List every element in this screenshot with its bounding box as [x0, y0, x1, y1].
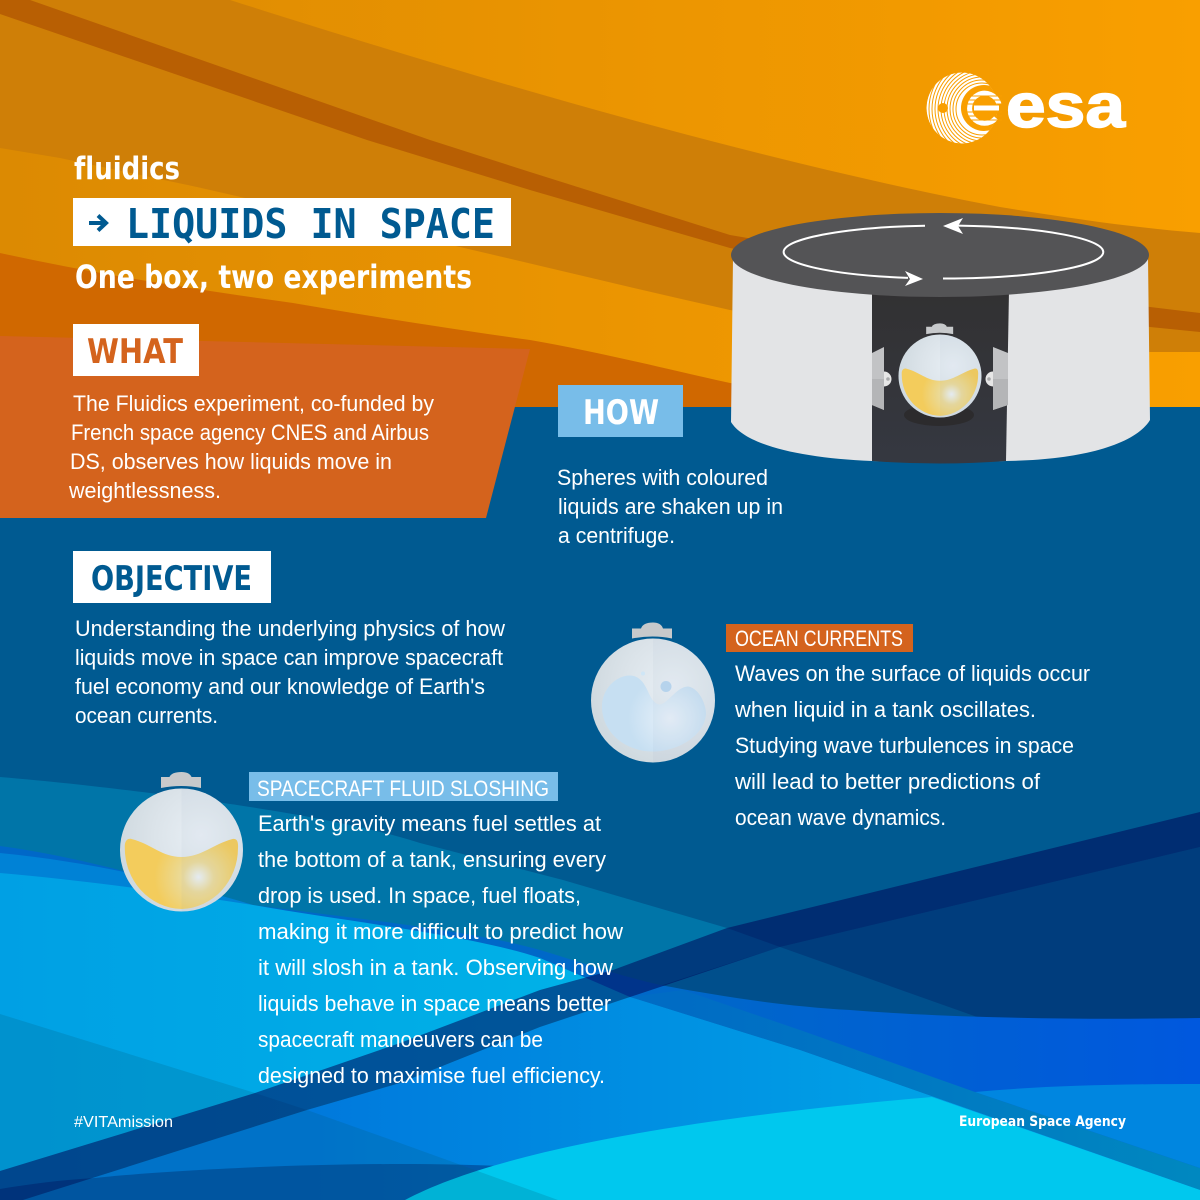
spacecraft fluid sloshing heading: SPACECRAFT FLUID SLOSHING [257, 776, 549, 801]
ocean currents text: when liquid in a tank oscillates. [734, 697, 1036, 722]
spacecraft fluid sloshing text: liquids behave in space means better [258, 991, 611, 1016]
how heading [558, 385, 683, 437]
spacecraft fluid sloshing text: it will slosh in a tank. Observing how [258, 955, 613, 980]
ocean currents text: Studying wave turbulences in space [735, 733, 1074, 758]
background: orange waves [0, 0, 1200, 440]
background: blue waves [0, 407, 1200, 1200]
ocean currents heading: OCEAN CURRENTS [735, 626, 903, 651]
what heading [73, 324, 199, 376]
what heading: WHAT [87, 332, 184, 372]
title banner [73, 198, 511, 248]
spacecraft fluid sloshing text [258, 811, 623, 1088]
fuel sphere [120, 772, 243, 912]
logo wordmark: esa [1006, 72, 1126, 141]
what text: French space agency CNES and Airbus [71, 420, 429, 445]
centrifuge illustration [731, 213, 1150, 464]
how text: Spheres with coloured [557, 465, 768, 490]
credit: European Space Agency [959, 1114, 1126, 1130]
title: fluidics: fluidics [74, 151, 180, 187]
ocean currents text [734, 661, 1090, 830]
how text: liquids are shaken up in [558, 494, 783, 519]
spacecraft fluid sloshing text: making it more difficult to predict how [258, 919, 623, 944]
ocean currents text: will lead to better predictions of [734, 769, 1041, 794]
ocean currents text: Waves on the surface of liquids occur [735, 661, 1090, 686]
spacecraft fluid sloshing text: the bottom of a tank, ensuring every [258, 847, 606, 872]
sphere mounts [872, 347, 1008, 410]
how heading: HOW [583, 393, 659, 433]
rotation arrows [784, 218, 1103, 286]
objective text [75, 616, 505, 728]
ocean sphere [591, 622, 715, 762]
objective text: Understanding the underlying physics of how [75, 616, 505, 641]
what text: The Fluidics experiment, co-funded by [73, 391, 434, 416]
sphere with yellow liquid [898, 323, 982, 418]
drum body [731, 258, 1150, 463]
spacecraft fluid sloshing text: drop is used. In space, fuel floats, [258, 883, 581, 908]
objective text: liquids move in space can improve spacecraft [75, 645, 503, 670]
icon: arrow [89, 216, 106, 230]
title text: LIQUIDS IN SPACE [126, 200, 495, 248]
esa logo [926, 72, 1126, 144]
how text: a centrifuge. [558, 523, 675, 548]
logo globe [926, 72, 998, 144]
panel: what background [0, 336, 530, 518]
what text: weightlessness. [68, 478, 221, 503]
sphere shadow [904, 404, 974, 426]
what text [68, 391, 434, 503]
subtitle: One box, two experiments [75, 258, 472, 296]
spacecraft fluid sloshing text: designed to maximise fuel efficiency. [258, 1063, 605, 1088]
hashtag: #VITAmission [74, 1114, 173, 1131]
objective heading [73, 551, 271, 603]
spacecraft fluid sloshing text: Earth's gravity means fuel settles at [258, 811, 601, 836]
ocean currents text: ocean wave dynamics. [735, 805, 946, 830]
spacecraft fluid sloshing text: spacecraft manoeuvers can be [258, 1027, 543, 1052]
what text: DS, observes how liquids move in [70, 449, 392, 474]
objective text: fuel economy and our knowledge of Earth's [75, 674, 485, 699]
logo inner e [966, 93, 1002, 123]
objective heading: OBJECTIVE [91, 559, 252, 599]
drum opening [872, 290, 1009, 464]
drum top [731, 213, 1149, 297]
objective text: ocean currents. [75, 703, 218, 728]
how text [557, 465, 783, 548]
